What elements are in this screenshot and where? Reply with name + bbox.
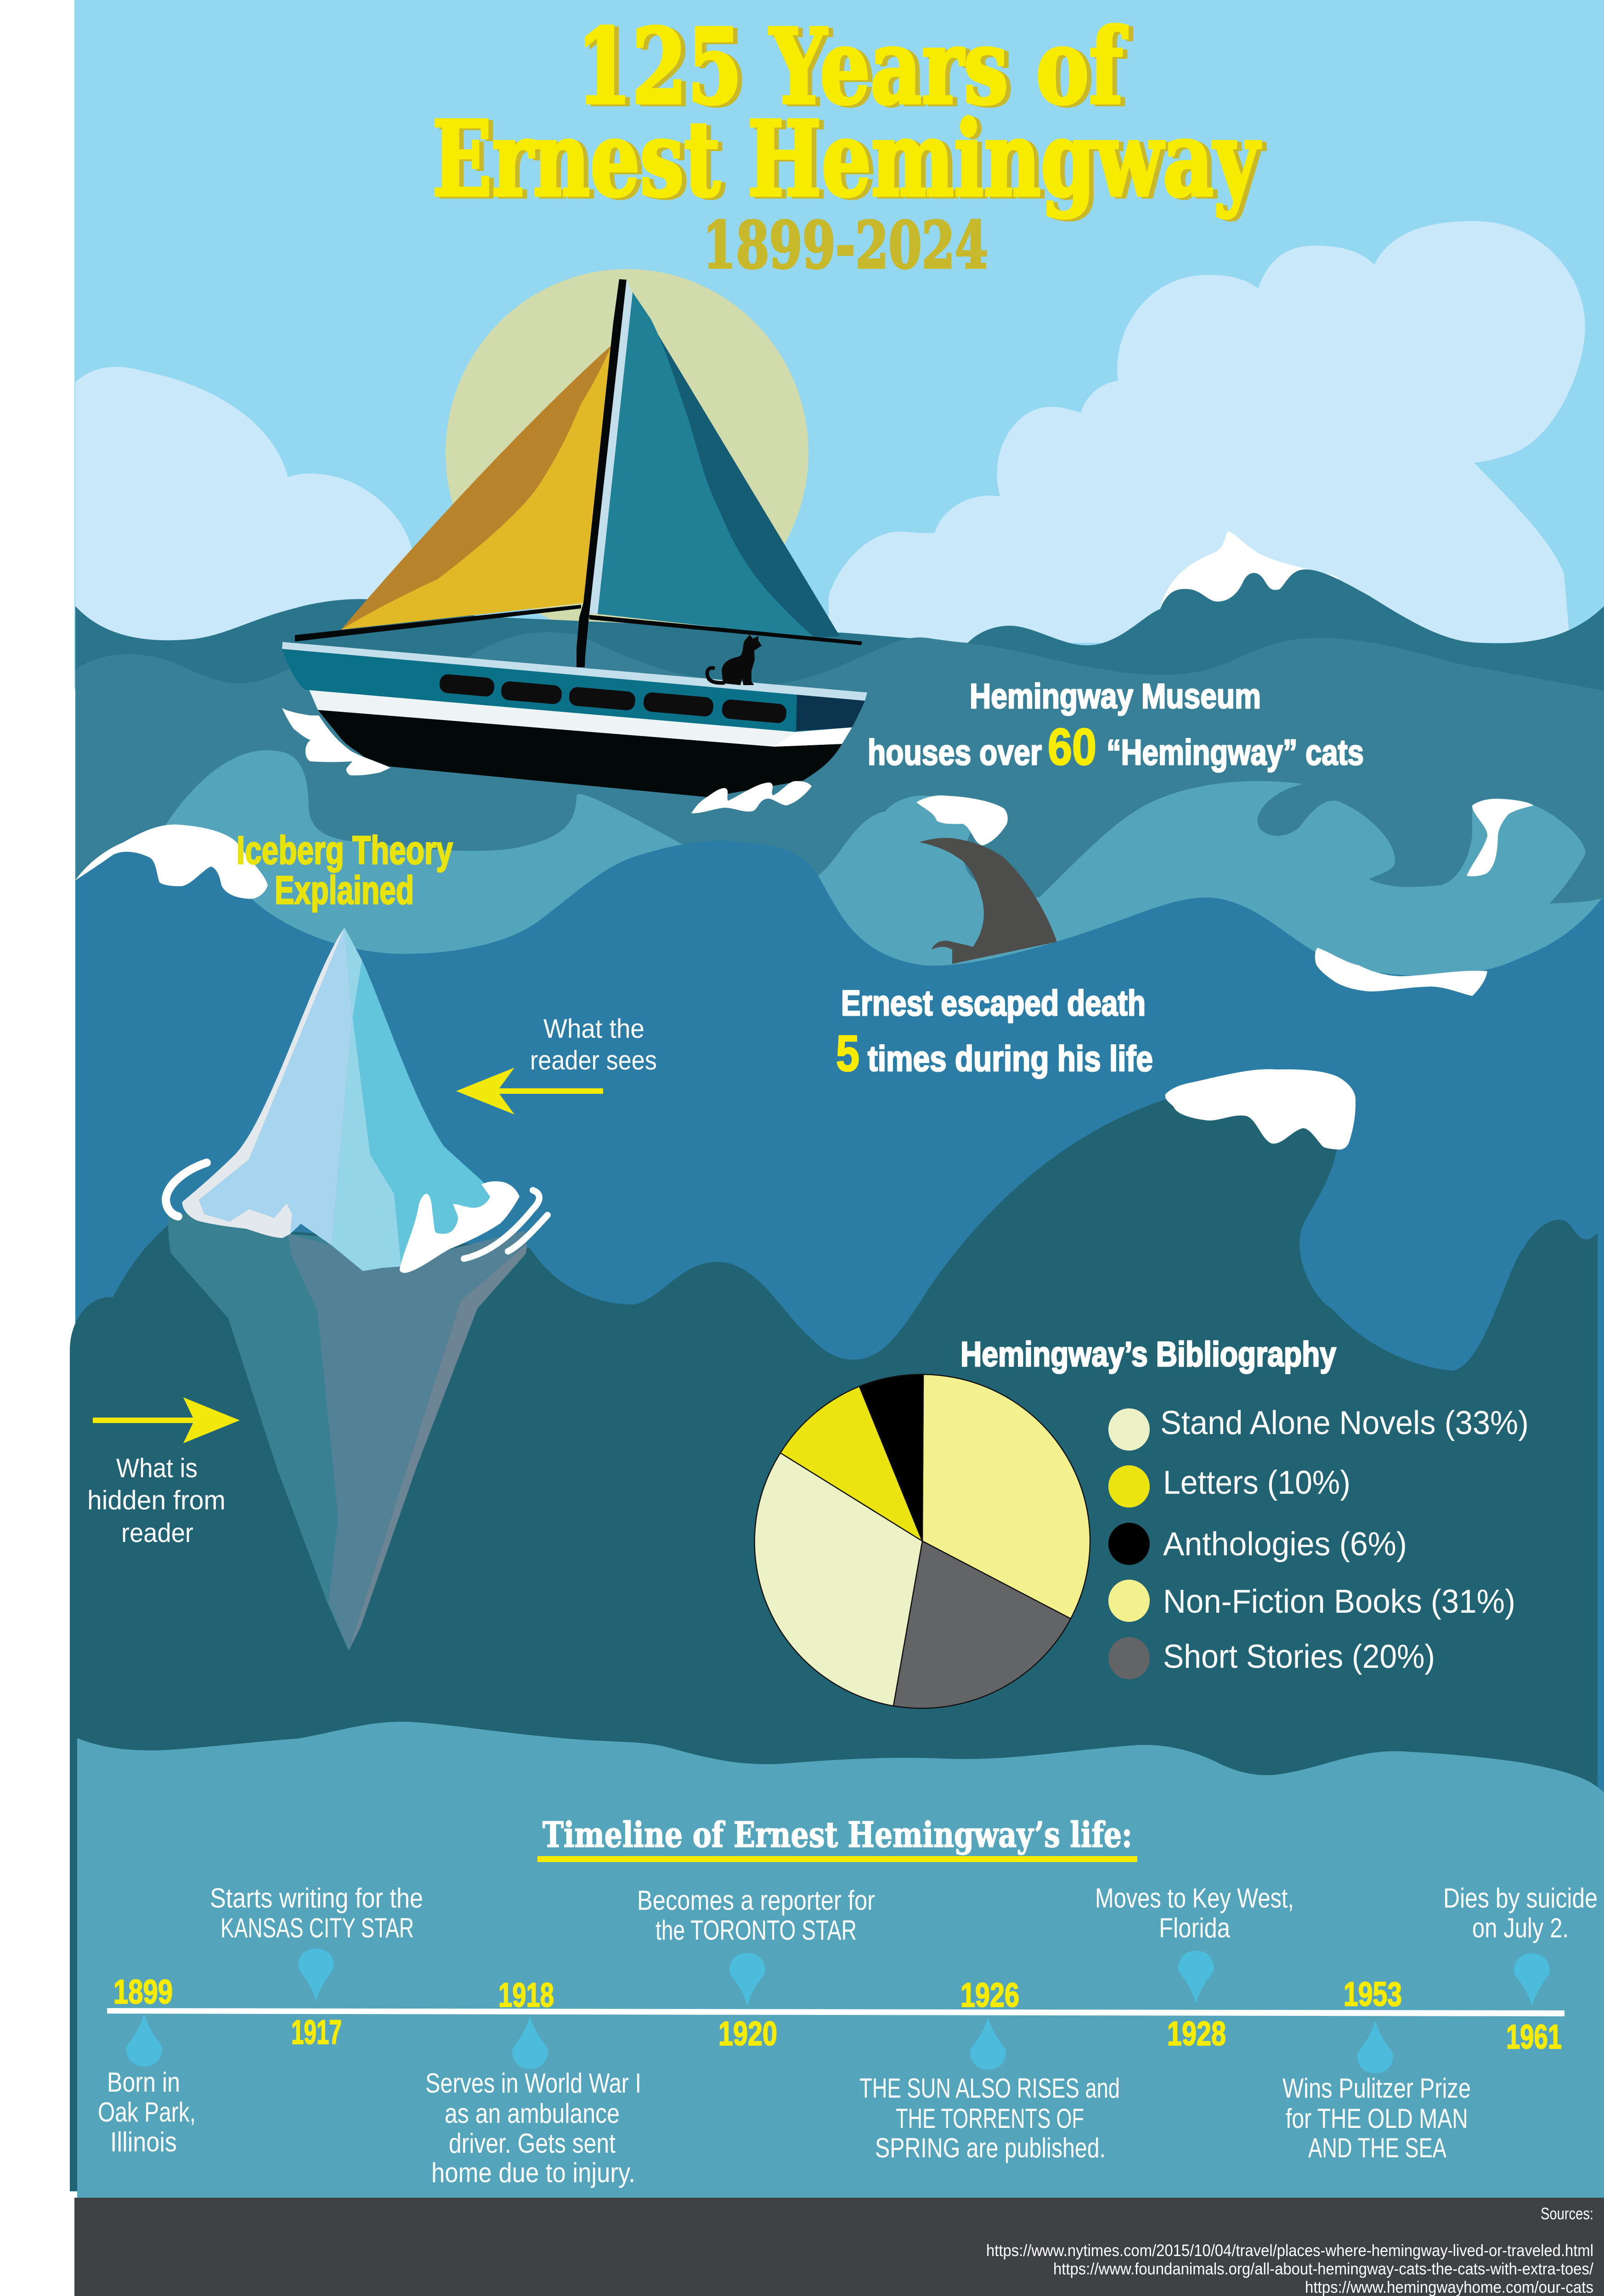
snow: left wave cap: [75, 824, 268, 899]
timeline event labels: Born in: [107, 2067, 180, 2098]
callout: escaped death: [836, 983, 1153, 1082]
cabin teal: [282, 649, 797, 732]
water swirl left: [166, 1163, 207, 1216]
light wave: centre: [781, 795, 1039, 1010]
label: hidden from reader: reader: [121, 1518, 193, 1548]
snow: centre wave cap: [916, 795, 1008, 845]
callout: escaped death: times during his life: [868, 1038, 1153, 1079]
icon: black cat: [707, 635, 762, 685]
hull white band: [309, 690, 852, 747]
sky background: [74, 0, 1604, 689]
cabin dark stern: [796, 692, 865, 731]
label: what the reader sees: What the: [543, 1014, 644, 1044]
timeline event labels: Becomes a reporter for: [637, 1885, 875, 1916]
label: what the reader sees: reader sees: [530, 1046, 657, 1075]
yellow sail shaded edge: [341, 345, 612, 630]
far wave: [75, 569, 1604, 827]
timeline event labels: for THE OLD MAN: [1286, 2103, 1468, 2134]
bibliography heading: Hemingway’s Bibliography: [960, 1335, 1336, 1374]
iceberg blue face: [199, 928, 352, 1245]
snow: right curl: [1467, 799, 1534, 876]
timeline event labels: THE TORRENTS OF: [896, 2103, 1084, 2134]
timeline event labels: Illinois: [110, 2127, 177, 2157]
timeline event labels: Serves in World War I: [425, 2068, 641, 2099]
dark sea layer: [70, 1075, 1598, 2191]
deck strip: [282, 642, 867, 701]
pie legend: Stand Alone Novels (33%): [1160, 1405, 1529, 1441]
timeline years: 1961: [1506, 2018, 1562, 2056]
timeline event labels: on July 2.: [1472, 1913, 1569, 1943]
label: hidden from reader: hidden from: [87, 1486, 226, 1515]
cloud: right: [829, 221, 1585, 643]
icon: sailboat: [282, 279, 867, 797]
timeline event labels: driver. Gets sent: [449, 2128, 616, 2159]
water swirl right: [464, 1190, 539, 1259]
timeline years: 1920: [718, 2015, 777, 2053]
timeline heading: Timeline of Ernest Hemingway’s life:: [542, 1814, 1132, 1855]
timeline event labels: KANSAS CITY STAR: [220, 1913, 414, 1943]
label: what the reader sees: [530, 1014, 657, 1075]
label: hidden from reader: What is: [116, 1453, 198, 1483]
iceberg heading: [237, 828, 453, 912]
callout: Hemingway Museum cats: “Hemingway” cats: [1107, 732, 1364, 772]
booms: [295, 605, 862, 645]
timeline years: 1899: [113, 1973, 173, 2011]
sources list: Sources:: [1541, 2204, 1593, 2223]
icon: shark fin: [919, 838, 1057, 964]
timeline event labels: THE SUN ALSO RISES and: [859, 2073, 1120, 2104]
timeline event labels: [98, 1883, 1598, 2188]
snow: lower right wave: [1315, 948, 1487, 996]
iceberg cyan face: [353, 960, 505, 1266]
footer panel: [74, 2198, 1604, 2296]
splash: left of boat: [282, 708, 390, 776]
callout: Hemingway Museum cats: [868, 677, 1364, 776]
timeline bar: [107, 2008, 1564, 2016]
yellow sail: [341, 345, 612, 630]
callout: Hemingway Museum cats: houses over: [868, 732, 1042, 772]
timeline event labels: as an ambulance: [445, 2098, 620, 2129]
iceberg heading: Iceberg Theory: [237, 828, 453, 872]
timeline years: 1928: [1167, 2015, 1226, 2053]
callout: escaped death: Ernest escaped death: [841, 983, 1146, 1023]
timeline event labels: Florida: [1159, 1913, 1231, 1943]
bottom timeline sea panel: [77, 1722, 1604, 2198]
timeline event labels: Wins Pulitzer Prize: [1282, 2073, 1471, 2104]
portholes: [439, 674, 787, 724]
sources list: [891, 2204, 1593, 2296]
pie legend: Anthologies (6%): [1163, 1526, 1407, 1563]
teal sail: [598, 292, 815, 638]
splash: right of boat: [691, 781, 812, 813]
iceberg mid face: [332, 928, 401, 1271]
light wave: left: [138, 750, 781, 964]
callout: escaped death: 5: [836, 1025, 859, 1082]
timeline event labels: home due to injury.: [431, 2157, 635, 2188]
title years: 1899-2024: [703, 208, 988, 283]
sun: [446, 269, 808, 636]
iceberg heading: Explained: [275, 868, 414, 912]
timeline drops: [126, 1948, 1550, 2073]
iceberg left snow face: [182, 928, 345, 1238]
timeline event labels: Moves to Key West,: [1095, 1883, 1294, 1913]
title line 2: Ernest Hemingway: [437, 101, 1266, 222]
hull black: [318, 710, 842, 797]
arrow: what the reader sees: [456, 1068, 603, 1114]
pie legend: Letters (10%): [1163, 1464, 1350, 1501]
blue sea layer: [75, 825, 1604, 1814]
timeline years: 1918: [498, 1976, 554, 2014]
timeline event labels: SPRING are published.: [875, 2133, 1106, 2163]
callout: Hemingway Museum cats: Hemingway Museum: [970, 677, 1261, 716]
light wave: right: [1039, 781, 1604, 1010]
submerged iceberg left: [168, 1212, 367, 1651]
mast highlight: [587, 279, 633, 614]
timeline years: 1953: [1344, 1975, 1402, 2013]
submerged iceberg centre: [288, 1231, 527, 1651]
pie legend: [1108, 1405, 1529, 1679]
callout: Hemingway Museum cats: 60: [1048, 718, 1096, 776]
snow on far wave: [1160, 532, 1338, 643]
pie legend: Short Stories (20%): [1163, 1638, 1435, 1675]
timeline event labels: Oak Park,: [98, 2097, 196, 2127]
title line 1: 125 Years of: [581, 8, 1132, 129]
title: [432, 6, 1266, 283]
timeline event labels: the TORONTO STAR: [655, 1915, 857, 1946]
timeline years: 1926: [960, 1976, 1019, 2014]
submerged iceberg right shadow: [349, 1244, 527, 1651]
timeline event labels: AND THE SEA: [1308, 2133, 1446, 2163]
snow: dark wave crest: [1165, 1069, 1355, 1150]
mast: [576, 279, 627, 667]
teal sail shadow: [598, 292, 840, 638]
iceberg white splash: [400, 1182, 520, 1273]
timeline years: [113, 1973, 1562, 2056]
label: hidden from reader: [87, 1453, 226, 1548]
title line 2: Ernest Hemingway: [432, 99, 1261, 220]
arrow: what is hidden: [93, 1397, 240, 1443]
title line 1: 125 Years of: [576, 6, 1127, 128]
cloud: left: [75, 367, 459, 643]
timeline years: 1917: [291, 2013, 342, 2051]
second wave: [75, 632, 1604, 1010]
pie legend: Non-Fiction Books (31%): [1163, 1583, 1515, 1620]
timeline event labels: Starts writing for the: [210, 1883, 423, 1913]
iceberg illustration: [166, 928, 548, 1651]
pie chart: [755, 1374, 1090, 1708]
